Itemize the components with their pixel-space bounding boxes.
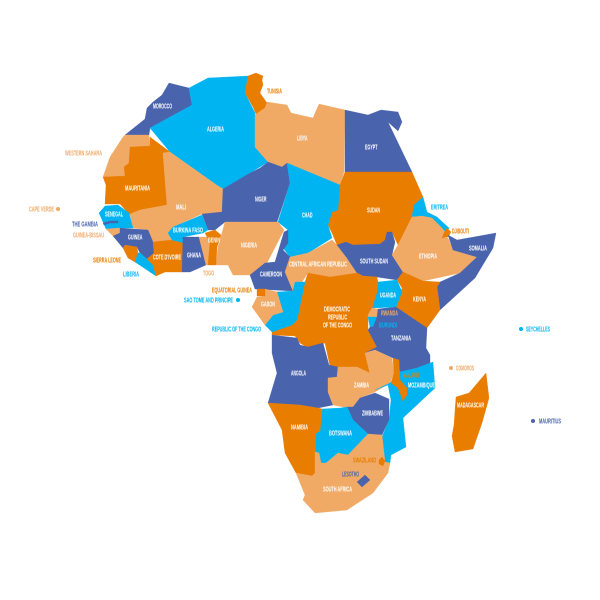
country: Democratic Republic of the Congo	[272, 273, 378, 378]
label: Zambia: ZAMBIA	[354, 381, 369, 390]
label: Liberia: LIBERIA	[123, 270, 139, 279]
country: Angola	[268, 335, 338, 408]
country: Libya	[255, 102, 345, 185]
country: South Sudan	[337, 232, 403, 280]
country: Uganda	[372, 280, 402, 308]
country: Mauritania	[103, 137, 170, 215]
label: Democratic Republic of the Congo: DEMOCRATIC	[324, 305, 350, 314]
country: Burkina Faso	[168, 215, 208, 243]
country: Liberia	[135, 253, 156, 276]
country: Djibouti	[442, 228, 451, 238]
country: Morocco	[125, 83, 192, 135]
label: Zimbabwe: ZIMBABWE	[362, 409, 383, 418]
label: Democratic Republic of the Congo	[323, 305, 352, 330]
country: Tanzania	[365, 307, 430, 372]
marker: Cape Verde	[56, 207, 60, 211]
label: Tunisia: TUNISIA	[267, 87, 282, 96]
country: Burundi	[368, 317, 377, 327]
label: Rwanda: RWANDA	[381, 309, 398, 318]
country: Togo	[199, 237, 210, 265]
label: Western Sahara: WESTERN SAHARA	[65, 149, 102, 158]
label: Democratic Republic of the Congo: OF THE CONGO	[323, 321, 352, 330]
country: Ghana	[182, 237, 206, 272]
label: Sudan: SUDAN	[367, 206, 380, 215]
label: Cameroon: CAMEROON	[260, 270, 282, 279]
marker: Sao Tome and Principe	[236, 298, 240, 302]
label: Central African Republic: CENTRAL AFRICAN REPUBLIC	[289, 260, 347, 269]
country: Somalia	[437, 233, 496, 310]
country: Equatorial Guinea	[257, 289, 265, 296]
label: Gabon: GABON	[261, 300, 275, 309]
label: South Africa: SOUTH AFRICA	[323, 485, 352, 494]
label: Burkina Faso: BURKINA FASO	[173, 226, 203, 235]
label: Niger: NIGER	[255, 195, 267, 204]
country: The Gambia	[103, 221, 118, 225]
marker: Comoros	[449, 366, 453, 370]
country: Benin	[205, 230, 221, 265]
label: Libya: LIBYA	[297, 134, 308, 143]
label: Ethiopia: ETHIOPIA	[419, 252, 437, 261]
label: Tanzania: TANZANIA	[391, 334, 411, 343]
label: Madagascar: MADAGASCAR	[457, 401, 484, 410]
label: Sierra Leone: SIERRA LEONE	[93, 256, 121, 265]
label: Burundi: BURUNDI	[379, 321, 397, 330]
label: Algeria: ALGERIA	[207, 125, 224, 134]
country: Eritrea	[412, 197, 449, 233]
label: Uganda: UGANDA	[380, 291, 396, 300]
country name labels: LESOTHO	[342, 470, 359, 479]
country: Guinea	[113, 228, 154, 259]
country: Nigeria	[216, 222, 284, 275]
country: Niger	[202, 162, 290, 230]
country: Tunisia	[245, 73, 267, 114]
label: Mauritius: MAURITIUS	[539, 417, 561, 426]
label: The Gambia: THE GAMBIA	[72, 220, 98, 229]
country: Central African Republic	[285, 240, 357, 291]
country: Mozambique	[375, 362, 435, 463]
country: Western Sahara	[103, 135, 150, 177]
country: Gabon	[252, 289, 283, 325]
label: Ghana: GHANA	[187, 251, 201, 260]
country: Zambia	[328, 350, 394, 408]
country name labels: CHAD	[302, 211, 312, 220]
marker: Mauritius	[531, 419, 535, 423]
country: Zimbabwe	[347, 393, 389, 435]
label: Swaziland: SWAZILAND	[353, 456, 376, 465]
label: Senegal: SENEGAL	[105, 210, 123, 219]
country: Egypt	[345, 110, 412, 172]
marker: Seychelles	[519, 327, 523, 331]
label: Eritrea: ERITREA	[431, 203, 448, 212]
label: Guinea-Bissau: GUINEA-BISSAU	[73, 231, 104, 240]
country: Ethiopia	[392, 216, 477, 281]
map: countries of Africa	[99, 73, 496, 513]
label: Cape Verde: CAPE VERDE	[29, 205, 54, 214]
country: Lesotho	[357, 475, 370, 487]
label: Mauritania: MAURITANIA	[125, 184, 150, 193]
country name labels	[29, 87, 561, 494]
country name labels: COMOROS	[456, 364, 474, 373]
label: Benin: BENIN	[208, 236, 220, 245]
country: Cote d'Ivoire	[147, 240, 184, 276]
label: Kenya: KENYA	[413, 295, 426, 304]
country name labels: ANGOLA	[291, 369, 306, 378]
country: Sudan	[328, 172, 423, 245]
label: Togo: TOGO	[203, 269, 214, 278]
label: Democratic Republic of the Congo: REPUBLIC	[328, 313, 347, 322]
label: Mozambique: MOZAMBIQUE	[408, 381, 435, 390]
country name labels: SEYCHELLES	[526, 325, 550, 334]
label: Equatorial Guinea: EQUATORIAL GUINEA	[212, 286, 252, 295]
country: South Africa	[296, 434, 390, 513]
label: Guinea: GUINEA	[128, 233, 143, 242]
country: Republic of the Congo	[265, 282, 305, 332]
country: Madagascar	[452, 373, 489, 452]
label: Nigeria: NIGERIA	[241, 241, 257, 250]
island markers	[56, 207, 535, 423]
country: Chad	[278, 163, 340, 257]
label: Malawi: MALAWI	[403, 371, 419, 380]
label: Egypt: EGYPT	[365, 143, 378, 152]
country: Botswana	[315, 407, 368, 463]
country: Sierra Leone	[123, 245, 138, 262]
country: Mali	[130, 152, 223, 242]
label: Mali: MALI	[176, 203, 186, 212]
country: Kenya	[396, 272, 440, 328]
label: Somalia: SOMALIA	[469, 244, 487, 253]
country: Algeria	[150, 76, 268, 189]
country: Rwanda	[368, 308, 378, 317]
label: South Sudan: SOUTH SUDAN	[360, 257, 388, 266]
country: Guinea-Bissau	[106, 228, 120, 236]
label: Botswana: BOTSWANA	[329, 429, 352, 438]
country: Malawi	[391, 358, 407, 401]
country name labels: MOROCCO	[153, 102, 172, 111]
label: Namibia: NAMIBIA	[291, 423, 308, 432]
label: Cote d'Ivoire: COTE D'IVOIRE	[153, 253, 181, 262]
country: Senegal	[99, 205, 133, 229]
label: Republic of the Congo: REPUBLIC OF THE CONGO	[212, 325, 261, 334]
label: Sao Tome and Principe: SAO TOME AND PRINCIPE	[184, 296, 233, 305]
country: Namibia	[268, 403, 322, 476]
country: Cameroon	[250, 230, 293, 291]
country: Swaziland	[379, 457, 385, 466]
country name labels: DJIBOUTI	[452, 227, 469, 236]
